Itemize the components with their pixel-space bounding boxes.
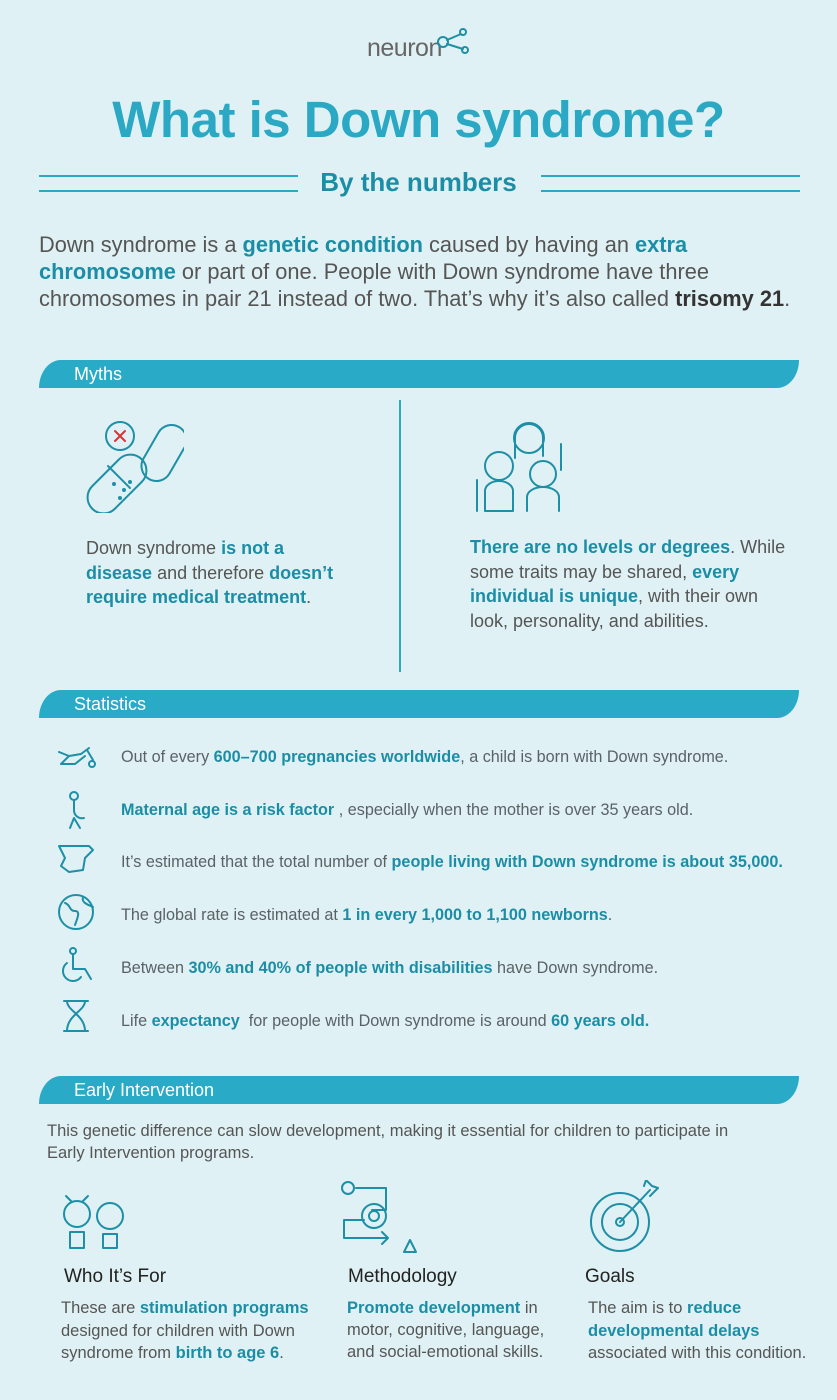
intro paragraph: chromosome or part of one. People with Down syndrome have three: [39, 259, 709, 284]
early intervention intro: [47, 1122, 728, 1162]
stat 3: It’s estimated that the total number of people living with Down syndrome is about 35,000.: [121, 853, 783, 871]
statistics icons: [58, 747, 96, 1032]
icon: hourglass: [63, 1000, 89, 1032]
icon: pills: [86, 421, 184, 513]
icon: children: [63, 1195, 124, 1249]
logo: [367, 28, 469, 62]
myth text 2: some traits may be shared, every: [470, 562, 739, 582]
text: designed for children with Down: [61, 1322, 295, 1340]
text: and social-emotional skills.: [347, 1343, 543, 1361]
text: [347, 1299, 544, 1361]
banner: Early Intervention: [39, 1076, 799, 1104]
myth text 1: [86, 538, 333, 607]
banner: Statistics: [39, 690, 799, 718]
myth text 1: disease and therefore doesn’t: [86, 562, 333, 582]
stat 1: Out of every 600–700 pregnancies worldwide, a child is born with Down syndrome.: [121, 748, 728, 766]
subtitle: By the numbers: [39, 167, 800, 197]
banner: Early Intervention: Early Intervention: [74, 1080, 214, 1100]
intro paragraph: Down syndrome is a genetic condition caused by having an extra: [39, 232, 687, 257]
heading: Goals: [585, 1266, 635, 1287]
icon: map: [58, 845, 94, 873]
text: These are stimulation programs: [61, 1299, 309, 1317]
title: What is Down syndrome?: [112, 91, 725, 148]
icon: stork: [58, 747, 96, 768]
myth text 1: require medical treatment.: [86, 587, 311, 607]
text: motor, cognitive, language,: [347, 1321, 544, 1339]
text: syndrome from birth to age 6.: [61, 1344, 284, 1362]
myth text 1: Down syndrome is not a: [86, 538, 284, 558]
intro paragraph: chromosomes in pair 21 instead of two. That’s why it’s also called trisomy 21.: [39, 286, 790, 311]
text: associated with this condition.: [588, 1344, 806, 1362]
column: goals: [585, 1180, 806, 1362]
myth text 2: individual is unique, with their own: [470, 586, 758, 606]
early intervention intro: This genetic difference can slow development, making it essential for children to participate in: [47, 1122, 728, 1140]
text: developmental delays: [588, 1322, 760, 1340]
panel: myths: [86, 400, 785, 672]
icon: pregnant: [69, 791, 85, 829]
stat 2: Maternal age is a risk factor , especially when the mother is over 35 years old.: [121, 801, 693, 819]
banner: Myths: Myths: [74, 364, 122, 384]
myth text 2: [470, 537, 785, 631]
heading: Methodology: [348, 1266, 457, 1287]
icon: wheelchair: [62, 947, 92, 982]
logo: neuron: [367, 34, 442, 62]
stat 6: Life expectancy for people with Down syndrome is around 60 years old.: [121, 1012, 649, 1030]
stat 4: The global rate is estimated at 1 in every 1,000 to 1,100 newborns.: [121, 906, 612, 924]
text: Promote development in: [347, 1299, 538, 1317]
divider: [399, 400, 401, 672]
text: [588, 1299, 806, 1362]
text: The aim is to reduce: [588, 1299, 741, 1317]
icon: family: [476, 422, 562, 512]
intro paragraph: [39, 232, 790, 311]
text: [61, 1299, 309, 1362]
icon: target: [590, 1180, 659, 1252]
heading: Who It’s For: [64, 1266, 166, 1287]
subtitle: By the numbers: By the numbers: [320, 167, 517, 197]
early intervention intro: Early Intervention programs.: [47, 1144, 254, 1162]
banner: Myths: [39, 360, 799, 388]
myth text 2: look, personality, and abilities.: [470, 610, 709, 630]
column: who it's for: [61, 1195, 309, 1362]
icon: globe: [58, 894, 94, 930]
banner: Statistics: Statistics: [74, 694, 146, 714]
stat 5: Between 30% and 40% of people with disabilities have Down syndrome.: [121, 959, 658, 977]
myth text 2: There are no levels or degrees. While: [470, 537, 785, 557]
column: methodology: [341, 1181, 544, 1361]
icon: process: [341, 1181, 417, 1253]
